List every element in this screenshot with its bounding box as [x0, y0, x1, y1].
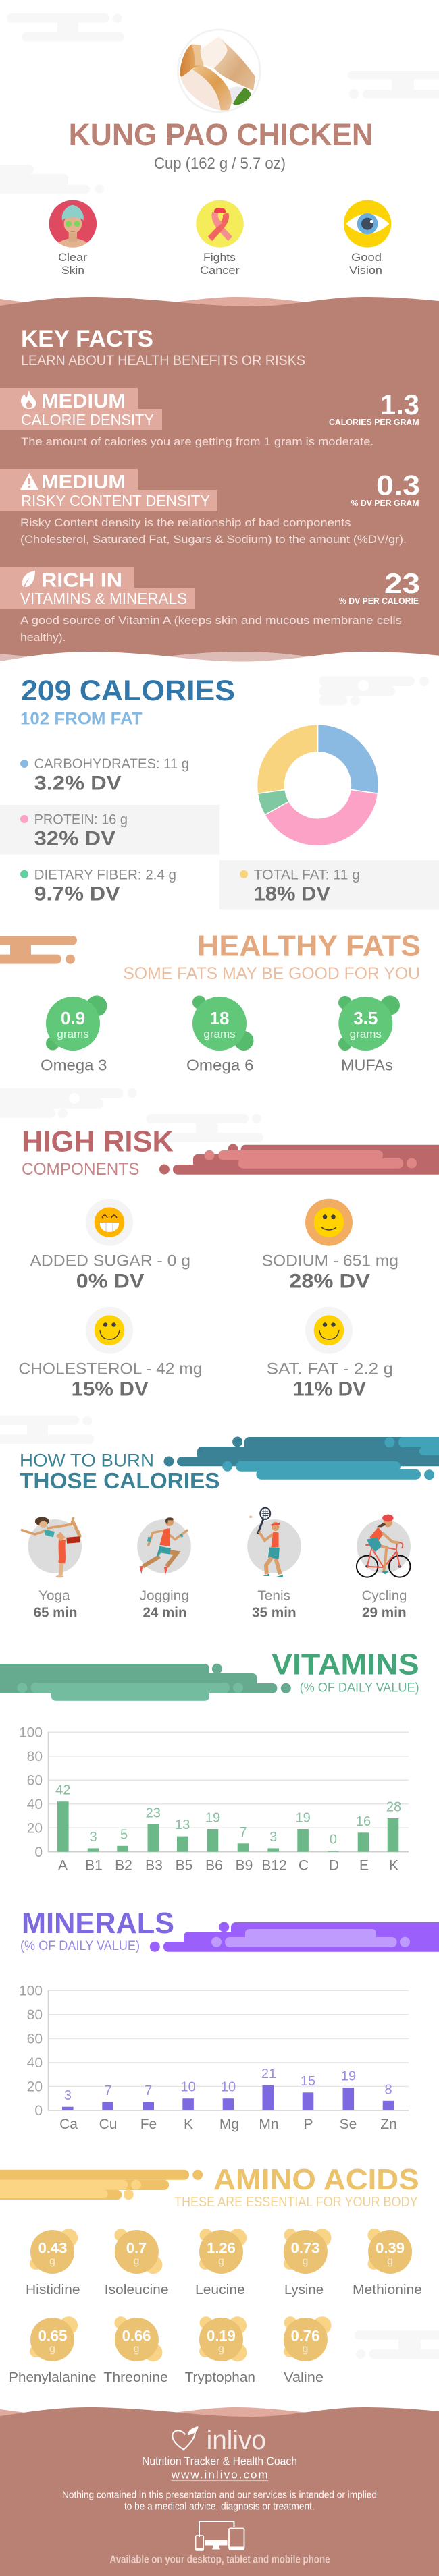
subheading: 102 FROM FAT: [20, 710, 143, 729]
bar chart: minerals: Ca: [59, 2117, 78, 2132]
saturated fat: SAT. FAT - 2.2 g: [267, 1360, 393, 1378]
histidine: Histidine: [26, 2282, 80, 2297]
bar chart: vitamins: B12: [261, 1858, 287, 1874]
threonine: 0.66: [122, 2327, 151, 2344]
subheading: COMPONENTS: [22, 1160, 139, 1179]
exercise: yoga: 65 min: [34, 1606, 77, 1621]
MUFAs: grams: [350, 1028, 382, 1040]
icon: devices: [196, 2521, 244, 2550]
icon: tennis player: [247, 1508, 301, 1577]
tryptophan: g: [218, 2343, 224, 2355]
methionine: [353, 2229, 422, 2297]
omega 3: grams: [57, 1028, 89, 1040]
tryptophan: [185, 2316, 255, 2385]
threonine: Threonine: [103, 2370, 168, 2385]
added sugar: [30, 1199, 190, 1292]
logo: inlivo: inlivo: [207, 2426, 266, 2455]
benefit: good vision: [344, 200, 391, 277]
bar chart: minerals: K: [184, 2117, 193, 2132]
wave background: [0, 2407, 439, 2576]
cholesterol: CHOLESTEROL - 42 mg: [18, 1360, 202, 1378]
phenylalanine: 0.65: [38, 2327, 67, 2344]
exercise: cycling: 29 min: [362, 1606, 407, 1621]
calorie density: CALORIES PER GRAM: [329, 417, 419, 427]
sodium: [262, 1199, 398, 1292]
legend: total fat: 18% DV: [254, 883, 330, 905]
phenylalanine: [9, 2316, 97, 2385]
bar chart: vitamins: 100: [19, 1725, 43, 1741]
legend: carbohydrates: [20, 756, 189, 794]
saturated fat: 11% DV: [293, 1378, 366, 1400]
lysine: 0.73: [291, 2239, 319, 2256]
icon: smiley face: [305, 1307, 353, 1354]
bar chart: vitamins: B6: [205, 1858, 223, 1874]
legend: total fat: [220, 860, 439, 909]
icon: ribbon: [196, 200, 244, 248]
saturated fat: [267, 1307, 393, 1400]
legend: dietary fiber: [20, 868, 176, 905]
panel: how to burn those calories: [20, 1437, 439, 1621]
legend: dietary fiber: 9.7% DV: [34, 883, 120, 905]
benefit: fights cancer: Cancer: [200, 264, 240, 277]
rich in vitamins and minerals: healthy).: [20, 631, 66, 644]
banner cloud: [0, 936, 77, 964]
exercise: tennis: 35 min: [252, 1606, 296, 1621]
icon: warning: [20, 473, 38, 490]
bar chart: vitamins: 3: [89, 1830, 97, 1845]
rich in vitamins and minerals: 23: [384, 567, 420, 599]
serving size subtitle: Cup (162 g / 5.7 oz): [154, 155, 286, 173]
calorie density: CALORIE DENSITY: [21, 411, 154, 428]
added sugar: ADDED SUGAR - 0 g: [30, 1252, 190, 1270]
valine: 0.76: [291, 2327, 319, 2344]
calorie density: 1.3: [380, 389, 419, 420]
threonine: g: [134, 2343, 139, 2355]
bar chart: minerals: 100: [19, 1984, 43, 1999]
exercise: cycling: [357, 1515, 411, 1621]
bar chart: minerals: Se: [340, 2117, 357, 2132]
heading: HIGH RISK: [22, 1125, 174, 1158]
benefit: clear skin: Clear: [58, 251, 87, 264]
lysine: Lysine: [284, 2282, 324, 2297]
bar chart: minerals: 60: [27, 2031, 43, 2047]
bar chart: minerals: Cu: [99, 2117, 117, 2132]
histidine: 0.43: [38, 2239, 67, 2256]
calorie density: MEDIUM: [41, 391, 126, 412]
icon: leaf: [22, 571, 35, 587]
omega 6: Omega 6: [186, 1057, 254, 1074]
icon: runner: [137, 1517, 191, 1575]
subheading: LEARN ABOUT HEALTH BENEFITS OR RISKS: [21, 352, 305, 368]
banner cloud: [163, 1437, 439, 1480]
exercise: yoga: [22, 1517, 82, 1621]
histidine: g: [49, 2256, 55, 2267]
bar chart: vitamins: 3: [269, 1830, 277, 1845]
bar chart: vitamins: E: [359, 1858, 369, 1874]
omega 3: 0.9: [61, 1008, 85, 1028]
panel: healthy fats: [0, 930, 421, 1074]
panel: how to burn those calories: THOSE CALORIES: [20, 1469, 220, 1494]
risky content density: RISKY CONTENT DENSITY: [21, 492, 210, 509]
bar chart: vitamins: 80: [27, 1749, 43, 1764]
panel: key facts: [0, 297, 439, 661]
exercise: cycling: Cycling: [362, 1589, 407, 1604]
exercise: tennis: [247, 1508, 301, 1621]
omega 6: [186, 996, 254, 1074]
benefit: clear skin: [49, 200, 97, 277]
bar chart: minerals: 19: [341, 2069, 356, 2084]
methionine: Methionine: [353, 2282, 422, 2297]
bar chart: vitamins: K: [389, 1858, 398, 1874]
bar chart: minerals: Mg: [220, 2117, 239, 2132]
exercise: jogging: [137, 1517, 191, 1621]
risky content density: % DV PER GRAM: [351, 498, 419, 508]
legend: protein: [0, 805, 220, 854]
bar chart: minerals: [19, 1984, 409, 2132]
bar chart: minerals: Zn: [380, 2117, 397, 2132]
subheading: (% OF DAILY VALUE): [20, 1938, 140, 1953]
subheading: SOME FATS MAY BE GOOD FOR YOU: [123, 964, 420, 983]
exercise: tennis: Tenis: [257, 1589, 290, 1604]
bar chart: vitamins: B5: [176, 1858, 192, 1874]
panel: amino acids: [0, 2163, 422, 2385]
bar chart: vitamins: [19, 1725, 409, 1874]
bar chart: minerals: 20: [27, 2079, 43, 2094]
calorie density: [0, 388, 419, 448]
bar chart: minerals: 0: [34, 2103, 43, 2119]
bar chart: minerals: 8: [384, 2082, 392, 2097]
bar chart: vitamins: B1: [85, 1858, 103, 1874]
omega 3: [41, 996, 107, 1074]
bar chart: vitamins: 19: [205, 1811, 220, 1826]
heading: MINERALS: [22, 1907, 174, 1940]
banner cloud: [159, 1144, 439, 1175]
MUFAs: 3.5: [353, 1008, 378, 1028]
omega 3: Omega 3: [41, 1057, 107, 1074]
bar chart: vitamins: 16: [356, 1814, 371, 1829]
tagline: Nutrition Tracker & Health Coach: [142, 2454, 297, 2467]
risky content density: [0, 469, 420, 546]
bar chart: vitamins: 7: [239, 1825, 247, 1840]
disclaimer: to be a medical advice, diagnosis or treatment.: [124, 2501, 315, 2512]
icon: smiley face: [86, 1307, 133, 1354]
methionine: 0.39: [376, 2239, 405, 2256]
histidine: [26, 2229, 80, 2297]
icon: eye: [344, 200, 391, 248]
title: KUNG PAO CHICKEN: [69, 117, 373, 152]
valine: [284, 2316, 331, 2385]
heading: AMINO ACIDS: [213, 2163, 419, 2196]
threonine: [103, 2316, 168, 2385]
rich in vitamins and minerals: RICH IN: [41, 570, 122, 592]
logo: inlivo: [172, 2426, 266, 2455]
bar chart: vitamins: C: [299, 1858, 309, 1874]
bar chart: minerals: 80: [27, 2007, 43, 2023]
exercise: yoga: Yoga: [38, 1589, 71, 1604]
risky content density: Risky Content density is the relationship of bad components: [20, 516, 351, 529]
bar chart: minerals: 7: [145, 2083, 152, 2098]
disclaimer: [62, 2490, 377, 2512]
banner cloud: [150, 1922, 439, 1952]
disclaimer: Nothing contained in this presentation and our services is intended or implied: [62, 2490, 377, 2500]
exercise: jogging: Jogging: [139, 1589, 189, 1604]
risky content density: 0.3: [376, 470, 420, 501]
tryptophan: Tryptophan: [185, 2370, 255, 2385]
bar chart: vitamins: 42: [55, 1783, 70, 1798]
bar chart: vitamins: 19: [295, 1811, 311, 1826]
bar chart: vitamins: 0: [330, 1832, 337, 1847]
bar chart: vitamins: B9: [236, 1858, 253, 1874]
legend: dietary fiber: DIETARY FIBER: 2.4 g: [34, 868, 176, 883]
wave background: [0, 297, 439, 661]
legend: total fat: TOTAL FAT: 11 g: [254, 868, 360, 883]
icon: cyclist: [357, 1515, 411, 1577]
cholesterol: 15% DV: [72, 1378, 149, 1400]
benefit: good vision: Vision: [349, 264, 382, 277]
website link: www.inlivo.com: [171, 2468, 268, 2481]
subheading: THESE ARE ESSENTIAL FOR YOUR BODY: [174, 2195, 418, 2210]
isoleucine: g: [134, 2256, 139, 2267]
bar chart: vitamins: 0: [34, 1845, 43, 1860]
valine: Valine: [284, 2370, 324, 2385]
bar chart: minerals: 10: [221, 2080, 236, 2095]
icon: flame: [21, 391, 36, 409]
icon: yoga pose: [22, 1517, 82, 1577]
bar chart: vitamins: 20: [27, 1820, 43, 1837]
omega 6: 18: [210, 1008, 229, 1028]
bar chart: minerals: 10: [180, 2080, 196, 2095]
panel: calories: [0, 675, 439, 909]
MUFAs: MUFAs: [341, 1057, 393, 1074]
leucine: 1.26: [207, 2239, 236, 2256]
exercise: jogging: 24 min: [143, 1606, 186, 1621]
risky content density: MEDIUM: [41, 472, 126, 493]
banner cloud: [0, 1664, 291, 1701]
bar chart: vitamins: B2: [115, 1858, 132, 1874]
heading: HOW TO BURN: [20, 1450, 154, 1470]
risky content density: (Cholesterol, Saturated Fat, Sugars & Sodium) to the amount (%DV/gr).: [20, 533, 407, 546]
sodium: SODIUM - 651 mg: [262, 1252, 398, 1270]
sodium: 28% DV: [289, 1270, 370, 1292]
bar chart: vitamins: B3: [145, 1858, 163, 1874]
panel: minerals: [19, 1907, 439, 2132]
legend: protein: PROTEIN: 16 g: [34, 812, 128, 827]
heading: VITAMINS: [272, 1648, 419, 1681]
header photo: kung pao chicken: [178, 30, 260, 112]
omega 6: grams: [203, 1028, 236, 1040]
bar chart: minerals: P: [303, 2117, 313, 2132]
lysine: [284, 2229, 331, 2297]
phenylalanine: Phenylalanine: [9, 2370, 97, 2385]
methionine: g: [387, 2256, 393, 2267]
panel: high risk components: [18, 1125, 439, 1400]
tryptophan: 0.19: [207, 2327, 236, 2344]
rich in vitamins and minerals: VITAMINS & MINERALS: [20, 590, 187, 607]
availability note: Available on your desktop, tablet and mobile phone: [109, 2554, 330, 2565]
bar chart: vitamins: 23: [146, 1805, 161, 1820]
benefit: fights cancer: [196, 200, 244, 277]
bar chart: minerals: Fe: [140, 2117, 157, 2132]
leucine: Leucine: [195, 2282, 245, 2297]
bar chart: minerals: 3: [64, 2088, 72, 2103]
cholesterol: [18, 1307, 202, 1400]
isoleucine: 0.7: [126, 2239, 147, 2256]
icon: woman with face mask: [49, 200, 97, 248]
bar chart: minerals: 7: [104, 2083, 112, 2098]
lysine: g: [303, 2256, 308, 2267]
bar chart: minerals: 15: [301, 2074, 315, 2089]
benefit: clear skin: Skin: [61, 264, 84, 277]
isoleucine: [105, 2229, 169, 2297]
heading: KEY FACTS: [21, 326, 153, 352]
rich in vitamins and minerals: % DV PER CALORIE: [339, 596, 419, 606]
legend: carbohydrates: CARBOHYDRATES: 11 g: [34, 756, 189, 772]
leucine: [195, 2229, 247, 2297]
bar chart: minerals: Mn: [259, 2117, 279, 2132]
phenylalanine: g: [49, 2343, 55, 2355]
legend: carbohydrates: 3.2% DV: [34, 772, 122, 794]
benefit: good vision: Good: [351, 251, 382, 264]
bar chart: vitamins: 5: [120, 1827, 128, 1842]
rich in vitamins and minerals: [0, 567, 420, 644]
bar chart: vitamins: A: [58, 1858, 68, 1874]
heading: HEALTHY FATS: [197, 930, 421, 963]
heading: 209 CALORIES: [21, 675, 235, 707]
MUFAs: [338, 996, 400, 1074]
subheading: (% OF DAILY VALUE): [300, 1680, 419, 1695]
bar chart: minerals: 21: [261, 2067, 276, 2081]
bar chart: vitamins: 13: [175, 1818, 190, 1832]
isoleucine: Isoleucine: [105, 2282, 169, 2297]
bar chart: minerals: 40: [27, 2055, 43, 2071]
panel: vitamins: [0, 1648, 419, 1874]
added sugar: 0% DV: [76, 1270, 145, 1292]
bar chart: vitamins: D: [329, 1858, 339, 1874]
benefit: fights cancer: Fights: [203, 251, 236, 264]
valine: g: [303, 2343, 308, 2355]
bar chart: vitamins: 60: [27, 1773, 43, 1788]
icon: smiley face: [305, 1199, 353, 1246]
leucine: g: [218, 2256, 224, 2267]
rich in vitamins and minerals: A good source of Vitamin A (keeps skin and mucous membrane cells: [20, 614, 402, 627]
legend: protein: 32% DV: [34, 827, 115, 849]
banner cloud: [0, 2170, 203, 2200]
panel: footer: [0, 2407, 439, 2576]
bar chart: vitamins: 40: [27, 1797, 43, 1812]
donut chart: [257, 725, 378, 846]
icon: grinning face: [86, 1199, 133, 1246]
calorie density: The amount of calories you are getting from 1 gram is moderate.: [21, 435, 374, 448]
bar chart: vitamins: 28: [386, 1800, 401, 1815]
